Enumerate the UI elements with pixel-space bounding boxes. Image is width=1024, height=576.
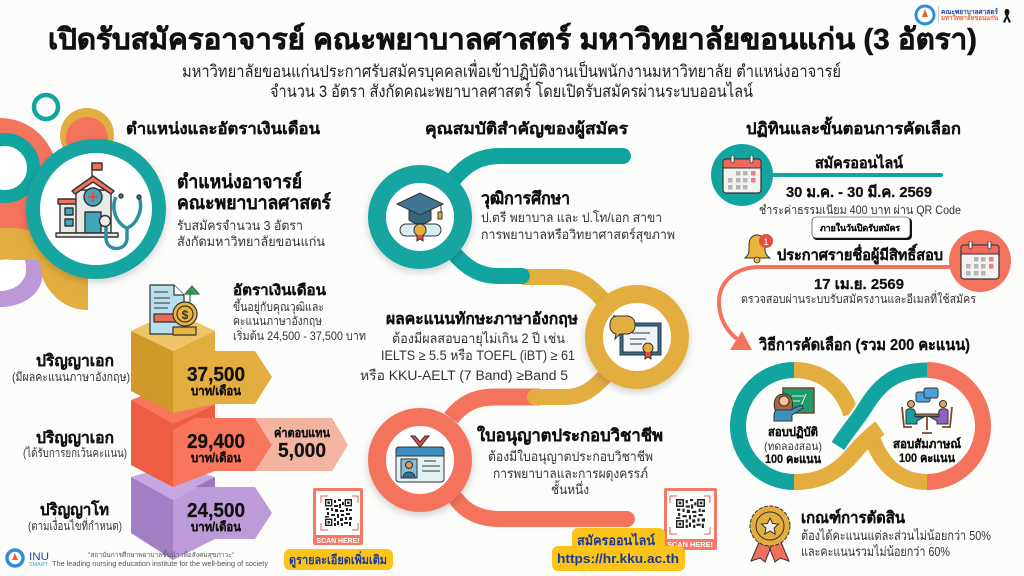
salary: 37,500 <box>187 364 245 398</box>
subtitle: มหาวิทยาลัยขอนแก่นประกาศรับสมัครบุคคลเพื่อเข้าปฏิบัติงานเป็นพนักงานมหาวิทยาลัย ตำแหน่งอาจารย์ <box>182 59 841 82</box>
button: apply online URL: https://hr.kku.ac.th <box>557 551 679 566</box>
icon: medal <box>750 506 790 562</box>
decision criteria: เกณฑ์การตัดสิน <box>801 508 905 527</box>
icon: ID card <box>396 436 444 482</box>
qualification ring: education <box>377 174 463 260</box>
callout: on closing day: ภายในวันปิดรับสมัคร <box>820 222 900 233</box>
step: online application <box>711 144 961 217</box>
qualification text: English: IELTS ≥ 5.5 หรือ TOEFL (iBT) ≥ 61 <box>381 348 575 363</box>
salary: 24,500 <box>187 500 245 534</box>
step: announce eligible: ประกาศรายชื่อผู้มีสิทธิ์สอบ <box>777 243 943 265</box>
degree label: doctorate exempted <box>23 429 127 460</box>
salary description: อัตราเงินเดือน <box>233 282 326 299</box>
qualification text: licence: ชั้นหนึ่ง <box>551 480 589 497</box>
QR card: apply: SCAN HERE! <box>667 540 713 549</box>
bonus arrow: compensation: 5,000 <box>278 440 326 462</box>
qualification text: education: ป.ตรี พยาบาล และ ป.โท/เอก สาขา <box>481 210 662 225</box>
salary: 29,400 <box>187 431 245 465</box>
logo: faculty of nursing: มหาวิทยาลัยขอนแก่น <box>941 14 998 22</box>
button: apply online URL: สมัครออนไลน์ <box>577 532 655 548</box>
qualification ring: English <box>594 294 680 380</box>
decorative circles, left <box>0 95 114 310</box>
position text: สังกัดมหาวิทยาลัยขอนแก่น <box>177 234 325 249</box>
icon: calendar <box>961 241 999 279</box>
stacked salary block: coral <box>131 384 272 487</box>
step: announce eligible: ตรวจสอบผ่านระบบรับสมัครงานและอีเมลที่ใช้สมัคร <box>741 290 976 306</box>
salary: 37,500: 37,500 <box>187 364 245 386</box>
step: announce eligible: 17 เม.ย. 2569 <box>814 276 904 293</box>
step: online application: ชำระค่าธรรมเนียม 400 บาท ผ่าน QR Code <box>759 203 961 217</box>
salary: 29,400: 29,400 <box>187 431 245 453</box>
salary description <box>233 282 366 343</box>
stacked salary block: gold <box>131 311 272 413</box>
subtitle <box>182 59 841 101</box>
callout: on closing day <box>812 217 912 240</box>
qualification text: English: หรือ KKU-AELT (7 Band) ≥Band 5 <box>360 368 568 383</box>
qualification text: licence: ใบอนุญาตประกอบวิชาชีพ <box>477 425 663 446</box>
salary: 24,500: 24,500 <box>187 500 245 522</box>
salary: 29,400: บาท/เดือน <box>191 451 241 465</box>
degree label: doctorate exempted: ปริญญาเอก <box>36 429 114 448</box>
bonus arrow: compensation: ค่าตอบแทน <box>274 426 330 440</box>
QR card: details <box>313 488 363 545</box>
footer: INU smart logo and motto: SMART <box>29 562 49 568</box>
icon: calendar <box>723 155 761 193</box>
icon: salary document and coin <box>150 285 199 335</box>
step: online application: 30 ม.ค. - 30 มี.ค. 2569 <box>786 184 932 201</box>
icon: hospital and stethoscope <box>56 163 141 248</box>
degree label: doctorate with English score <box>12 352 130 384</box>
footer: INU smart logo and motto <box>7 550 268 568</box>
subtitle: จำนวน 3 อัตรา สังกัดคณะพยาบาลศาสตร์ โดยเปิดรับสมัครผ่านระบบออนไลน์ <box>270 81 753 101</box>
selection: practical exam: สอบปฏิบัติ <box>768 425 818 439</box>
selection: practical exam <box>764 388 822 466</box>
logo: faculty of nursing <box>916 6 1011 24</box>
position text: คณะพยาบาลศาสตร์ <box>177 192 332 214</box>
position text: รับสมัครจำนวน 3 อัตรา <box>177 218 303 233</box>
selection heading: วิธีการคัดเลือก (รวม 200 คะแนน) <box>758 335 970 354</box>
footer: INU smart logo and motto: INU <box>29 551 49 563</box>
section heading: qualifications: คุณสมบัติสำคัญของผู้สมัคร <box>425 120 628 140</box>
degree label: masters <box>28 499 122 533</box>
position text <box>177 171 332 249</box>
degree label: masters: (ตามเงื่อนไขที่กำหนด) <box>28 517 122 533</box>
selection: interview: สอบสัมภาษณ์ <box>893 437 961 451</box>
ribbon: gold <box>522 277 605 397</box>
qualification text: licence: ต้องมีใบอนุญาตประกอบวิชาชีพ <box>488 449 653 465</box>
QR card: apply <box>664 488 717 550</box>
qualification text: English <box>360 310 578 383</box>
selection: interview: 100 คะแนน <box>899 451 956 465</box>
icon: interview table <box>902 388 952 433</box>
decision criteria <box>801 508 991 559</box>
salary description: คะแนนภาษาอังกฤษ <box>233 314 322 328</box>
footer: INU smart logo and motto: "สถาบันการศึกษาพยาบาลชั้นนำ เพื่อสังคมสุขภาวะ" <box>88 550 235 559</box>
selection: practical exam: (ทดลองสอน) <box>764 441 822 453</box>
qualification text: education: การพยาบาลหรือวิทยาศาสตร์สุขภาพ <box>481 227 675 243</box>
decision criteria: ต้องได้คะแนนแต่ละส่วนไม่น้อยกว่า 50% <box>801 528 991 543</box>
stacked salary block: purple <box>131 465 272 560</box>
ribbon: coral lower <box>451 397 627 519</box>
qualification text: licence: การพยาบาลและการผดุงครรภ์ <box>493 466 648 482</box>
section heading: calendar and selection: ปฏิทินและขั้นตอนการคัดเลือก <box>746 116 961 138</box>
step: online application: สมัครออนไลน์ <box>815 153 904 172</box>
icon: graduation cap <box>397 193 443 241</box>
qualification text: education <box>481 189 675 243</box>
decision criteria: และคะแนนรวมไม่น้อยกว่า 60% <box>801 544 950 559</box>
button: apply online URL <box>552 528 685 571</box>
arrow <box>730 331 752 350</box>
bonus arrow: compensation <box>255 418 348 471</box>
button: more details <box>284 549 393 570</box>
main teal ring with hospital icon <box>33 146 159 272</box>
icon: salary document and coin: $ <box>182 308 189 322</box>
infinity loop <box>738 370 983 482</box>
icon: bell <box>745 234 773 263</box>
salary description: ขึ้นอยู่กับคุณวุฒิและ <box>233 298 324 315</box>
icon: bell: 1 <box>763 237 769 247</box>
degree label: doctorate with English score: (มีผลคะแนนภาษาอังกฤษ) <box>12 370 130 384</box>
qualification text: education: วุฒิการศึกษา <box>481 189 570 209</box>
degree label: doctorate with English score: ปริญญาเอก <box>36 352 114 371</box>
footer: INU smart logo and motto: The leading nursing education institute for the well-being of society <box>52 559 268 568</box>
degree label: masters: ปริญญาโท <box>40 499 109 520</box>
QR card: details: SCAN HERE! <box>316 538 360 545</box>
section heading: position: ตำแหน่งและอัตราเงินเดือน <box>126 120 320 138</box>
qualification text: English: ต้องมีผลสอบอายุไม่เกิน 2 ปี เช่น <box>392 331 565 347</box>
qualification text: English: ผลคะแนนทักษะภาษาอังกฤษ <box>386 310 578 328</box>
salary: 24,500: บาท/เดือน <box>191 520 241 534</box>
logo: faculty of nursing: คณะพยาบาลศาสตร์ <box>941 7 998 16</box>
qualification ring: licence <box>377 417 463 503</box>
title: เปิดรับสมัครอาจารย์ คณะพยาบาลศาสตร์ มหาวิทยาลัยขอนแก่น (3 อัตรา) <box>48 22 977 56</box>
selection: interview <box>893 388 961 465</box>
salary description: เริ่มต้น 24,500 - 37,500 บาท <box>233 327 366 343</box>
selection: practical exam: 100 คะแนน <box>765 452 822 466</box>
salary: 37,500: บาท/เดือน <box>191 384 241 398</box>
step: announce eligible <box>719 230 1011 350</box>
ribbon: teal <box>453 156 623 276</box>
position text: ตำแหน่งอาจารย์ <box>177 171 302 193</box>
icon: certificate <box>610 316 661 359</box>
icon: teacher <box>774 388 814 421</box>
qualification text: licence <box>477 425 663 497</box>
degree label: doctorate exempted: (ได้รับการยกเว้นคะแนน) <box>23 446 127 460</box>
button: more details: ดูรายละเอียดเพิ่มเติม <box>289 551 387 568</box>
